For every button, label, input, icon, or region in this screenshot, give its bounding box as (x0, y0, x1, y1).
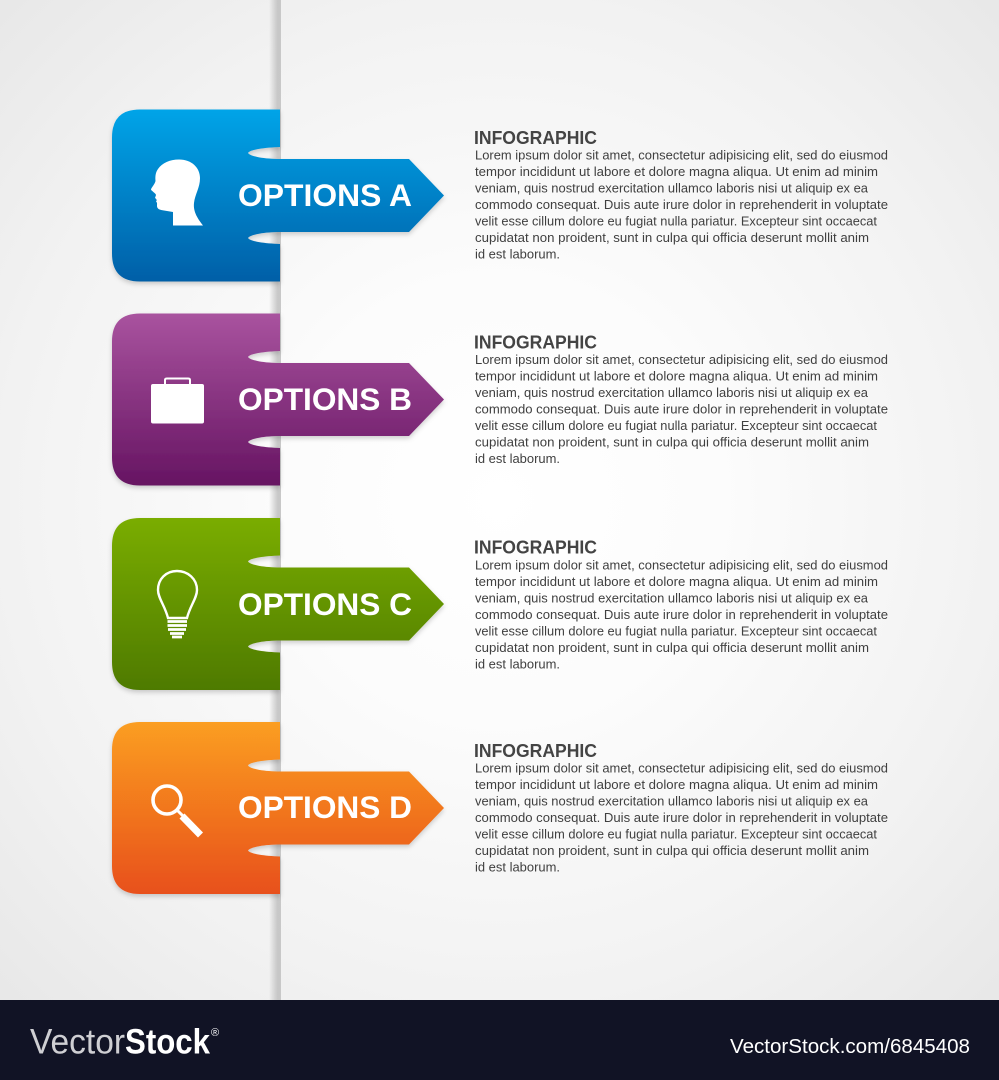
text block: option A: cupidatat non proident, sunt in culpa qui officia deserunt mollit anim (475, 230, 869, 245)
panel: option B (112, 314, 888, 486)
text block: option D: id est laborum. (475, 860, 560, 874)
text block: option C (474, 538, 888, 672)
tab: option A (112, 110, 444, 282)
icon: magnifier (153, 786, 200, 835)
text block: option D: Lorem ipsum dolor sit amet, consectetur adipisicing elit, sed do eiusmod (475, 760, 888, 776)
text block: option B: tempor incididunt ut labore et dolore magna aliqua. Ut enim ad minim (475, 368, 878, 384)
text block: option A (474, 128, 888, 262)
text block: option D: veniam, quis nostrud exercitation ullamco laboris nisi ut aliquip ex ea (475, 794, 869, 808)
panel: option D (112, 722, 888, 894)
tab: option B (112, 314, 444, 486)
logo: VectorStock: Stock (125, 1022, 210, 1062)
text block: option A: velit esse cillum dolore eu fugiat nulla pariatur. Excepteur sint occaecat (475, 214, 877, 228)
text block: option D (474, 741, 888, 874)
label: options A: OPTIONS A (238, 177, 412, 213)
text block: option C: velit esse cillum dolore eu fugiat nulla pariatur. Excepteur sint occaecat (475, 624, 877, 638)
reference: stock URL: VectorStock.com/6845408 (730, 1035, 970, 1058)
label: options B: OPTIONS B (238, 381, 412, 417)
text block: option B: id est laborum. (475, 451, 560, 466)
text block: option B: commodo consequat. Duis aute irure dolor in reprehenderit in voluptate (475, 402, 888, 416)
text block: option C: commodo consequat. Duis aute irure dolor in reprehenderit in voluptate (475, 607, 888, 622)
text block: option A: tempor incididunt ut labore et dolore magna aliqua. Ut enim ad minim (475, 164, 878, 179)
text block: option A: commodo consequat. Duis aute irure dolor in reprehenderit in voluptate (475, 197, 888, 212)
text block: option C: id est laborum. (475, 656, 560, 672)
panel: option C (112, 518, 888, 690)
text block: option D: tempor incididunt ut labore et dolore magna aliqua. Ut enim ad minim (475, 777, 878, 792)
tab: option D (112, 722, 444, 894)
icon: head (151, 160, 203, 226)
text block: option C: veniam, quis nostrud exercitation ullamco laboris nisi ut aliquip ex ea (475, 590, 869, 606)
text block: option B: INFOGRAPHIC (474, 332, 597, 352)
icon: briefcase (151, 378, 204, 424)
text block: option A: id est laborum. (475, 246, 560, 262)
text block: option D: cupidatat non proident, sunt in culpa qui officia deserunt mollit anim (475, 843, 869, 858)
text block: option A: veniam, quis nostrud exercitation ullamco laboris nisi ut aliquip ex ea (475, 180, 869, 196)
text block: option D: INFOGRAPHIC (474, 741, 597, 761)
text block: option B: cupidatat non proident, sunt in culpa qui officia deserunt mollit anim (475, 434, 869, 450)
text block: option D: velit esse cillum dolore eu fugiat nulla pariatur. Excepteur sint occaecat (475, 826, 877, 842)
text block: option A: Lorem ipsum dolor sit amet, consectetur adipisicing elit, sed do eiusmod (475, 148, 888, 162)
logo: VectorStock: Vector (30, 1022, 125, 1062)
text block: option C: cupidatat non proident, sunt in culpa qui officia deserunt mollit anim (475, 640, 869, 655)
logo: VectorStock: ® (211, 1027, 219, 1039)
text block: option B (474, 332, 888, 466)
icon: light bulb (158, 571, 197, 637)
text block: option B: Lorem ipsum dolor sit amet, consectetur adipisicing elit, sed do eiusmod (475, 352, 888, 367)
label: options C: OPTIONS C (238, 586, 412, 622)
text block: option B: veniam, quis nostrud exercitation ullamco laboris nisi ut aliquip ex ea (475, 385, 869, 400)
text block: option C: tempor incididunt ut labore et dolore magna aliqua. Ut enim ad minim (475, 574, 878, 589)
tab: option C (112, 518, 444, 690)
panel: option A (112, 110, 888, 282)
text block: option B: velit esse cillum dolore eu fugiat nulla pariatur. Excepteur sint occaecat (475, 418, 877, 433)
text block: option C: Lorem ipsum dolor sit amet, consectetur adipisicing elit, sed do eiusmod (475, 558, 888, 572)
logo: VectorStock (30, 1022, 219, 1062)
text block: option C: INFOGRAPHIC (474, 538, 597, 558)
footer bar (0, 1000, 999, 1080)
text block: option D: commodo consequat. Duis aute irure dolor in reprehenderit in voluptate (475, 810, 888, 825)
label: options D: OPTIONS D (238, 789, 412, 825)
text block: option A: INFOGRAPHIC (474, 128, 597, 148)
